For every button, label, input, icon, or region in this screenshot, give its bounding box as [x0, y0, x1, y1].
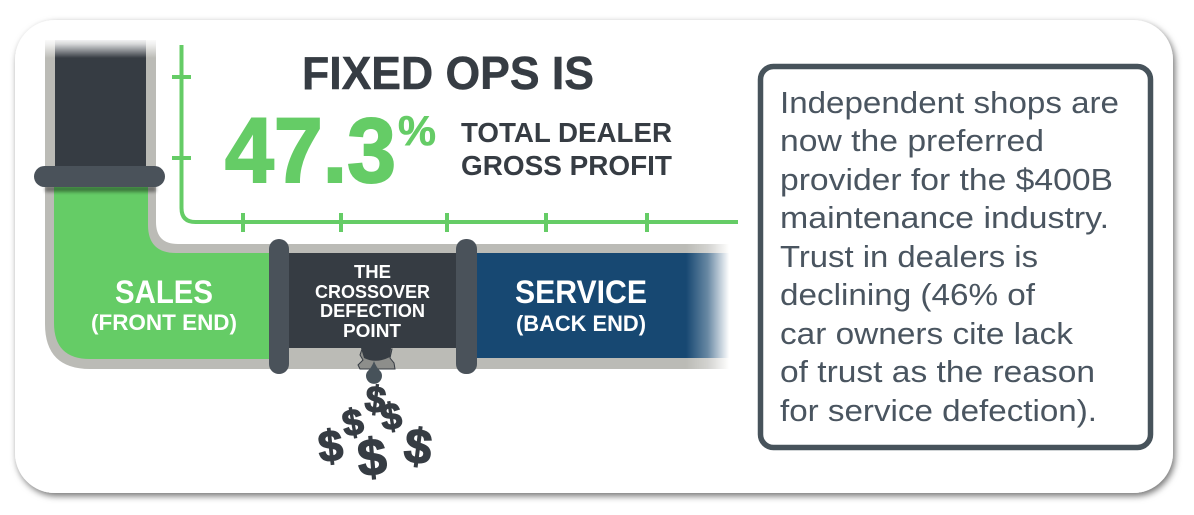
label: sales: (FRONT END) — [91, 310, 237, 335]
panel text: Independent shops are — [780, 85, 1119, 120]
coupler: left vertical — [269, 239, 289, 374]
label: sales — [91, 274, 237, 335]
icon: dollar signs — [316, 378, 435, 488]
panel text: Trust in dealers is — [780, 239, 1038, 274]
label: service: (BACK END) — [516, 311, 646, 336]
label: crossover defection point: THE — [354, 262, 391, 282]
label: service: SERVICE — [515, 274, 647, 310]
drop — [366, 361, 382, 384]
panel text: now the preferred — [780, 123, 1044, 158]
icon: dollar signs: $ — [363, 378, 389, 421]
big stat: 47.3 — [225, 100, 396, 202]
panel text: declining (46% of — [780, 277, 1035, 312]
pipe section: service blue — [470, 253, 732, 358]
panel text: car owners cite lack — [780, 316, 1074, 351]
pipe — [34, 38, 734, 374]
hole — [361, 348, 391, 361]
stat caption — [461, 117, 672, 181]
coupler: horizontal — [34, 166, 165, 187]
pipe casing — [45, 40, 732, 369]
icon: dollar signs: $ — [355, 428, 389, 488]
icon: pipe crack and leak — [358, 348, 395, 384]
stat caption: TOTAL DEALER — [461, 117, 672, 148]
label: crossover defection point: POINT — [343, 321, 401, 341]
icon: dollar signs: $ — [339, 401, 367, 445]
right fade — [686, 240, 734, 372]
label: service — [515, 274, 647, 336]
label: crossover defection point: CROSSOVER — [315, 282, 430, 302]
panel: text box — [760, 66, 1150, 448]
label: sales: SALES — [115, 274, 213, 310]
icon: dollar signs: $ — [401, 419, 435, 476]
stat caption: GROSS PROFIT — [461, 150, 672, 181]
pipe section: crossover dark — [285, 253, 460, 348]
coupler shadow — [45, 186, 156, 192]
label: crossover defection point — [315, 262, 430, 341]
axis lines — [172, 45, 738, 232]
icon: dollar signs: $ — [378, 395, 405, 439]
panel text: provider for the $400B — [780, 162, 1113, 197]
label: crossover defection point: DEFECTION — [320, 301, 425, 321]
panel text: maintenance industry. — [780, 200, 1109, 235]
top fade — [40, 38, 165, 58]
panel text: for service defection). — [780, 393, 1097, 428]
icon: dollar signs: $ — [316, 421, 345, 472]
pipe section: sales green — [54, 185, 280, 359]
pipe section: dark upper — [55, 40, 146, 170]
coupler: right vertical — [456, 239, 477, 374]
big stat: % — [398, 107, 436, 154]
panel text — [780, 85, 1119, 428]
title: FIXED OPS IS — [302, 47, 594, 99]
panel text: of trust as the reason — [780, 354, 1095, 389]
crack — [358, 349, 395, 369]
